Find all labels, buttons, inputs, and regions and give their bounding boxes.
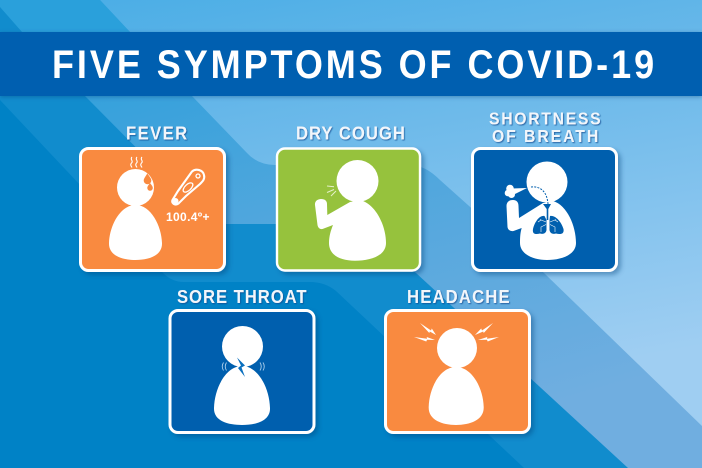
icon: person coughing	[315, 160, 386, 261]
panel: headache	[386, 286, 530, 432]
title: FIVE SYMPTOMS OF COVID-19	[52, 43, 654, 87]
lungs	[533, 204, 564, 234]
icon: person with sore throat	[214, 326, 270, 425]
card: fever	[80, 148, 224, 270]
title banner	[0, 32, 702, 96]
card: sore throat	[170, 310, 314, 432]
temperature label: 100.4º+	[166, 210, 210, 224]
heading: shortness of breath: OF BREATH	[492, 126, 598, 146]
heading: fever: FEVER	[126, 123, 187, 144]
panel: shortness of breath	[472, 109, 616, 270]
icon: person with fever	[109, 157, 162, 260]
card: headache	[386, 310, 530, 432]
icon: thermometer	[172, 170, 204, 204]
card: dry cough	[277, 148, 420, 270]
icon: person with headache	[414, 323, 499, 425]
icon: person with inhaler and lungs	[505, 162, 576, 260]
panel: sore throat	[170, 286, 314, 432]
heading: dry cough: DRY COUGH	[296, 123, 405, 144]
panel: dry cough	[277, 123, 420, 270]
card: shortness of breath	[472, 148, 616, 270]
heading: sore throat: SORE THROAT	[177, 286, 307, 307]
heading: shortness of breath	[489, 109, 601, 146]
heading: headache: HEADACHE	[407, 286, 510, 307]
heading: shortness of breath: SHORTNESS	[489, 109, 601, 129]
airway dashed line	[531, 187, 548, 204]
panel: fever	[80, 123, 224, 270]
